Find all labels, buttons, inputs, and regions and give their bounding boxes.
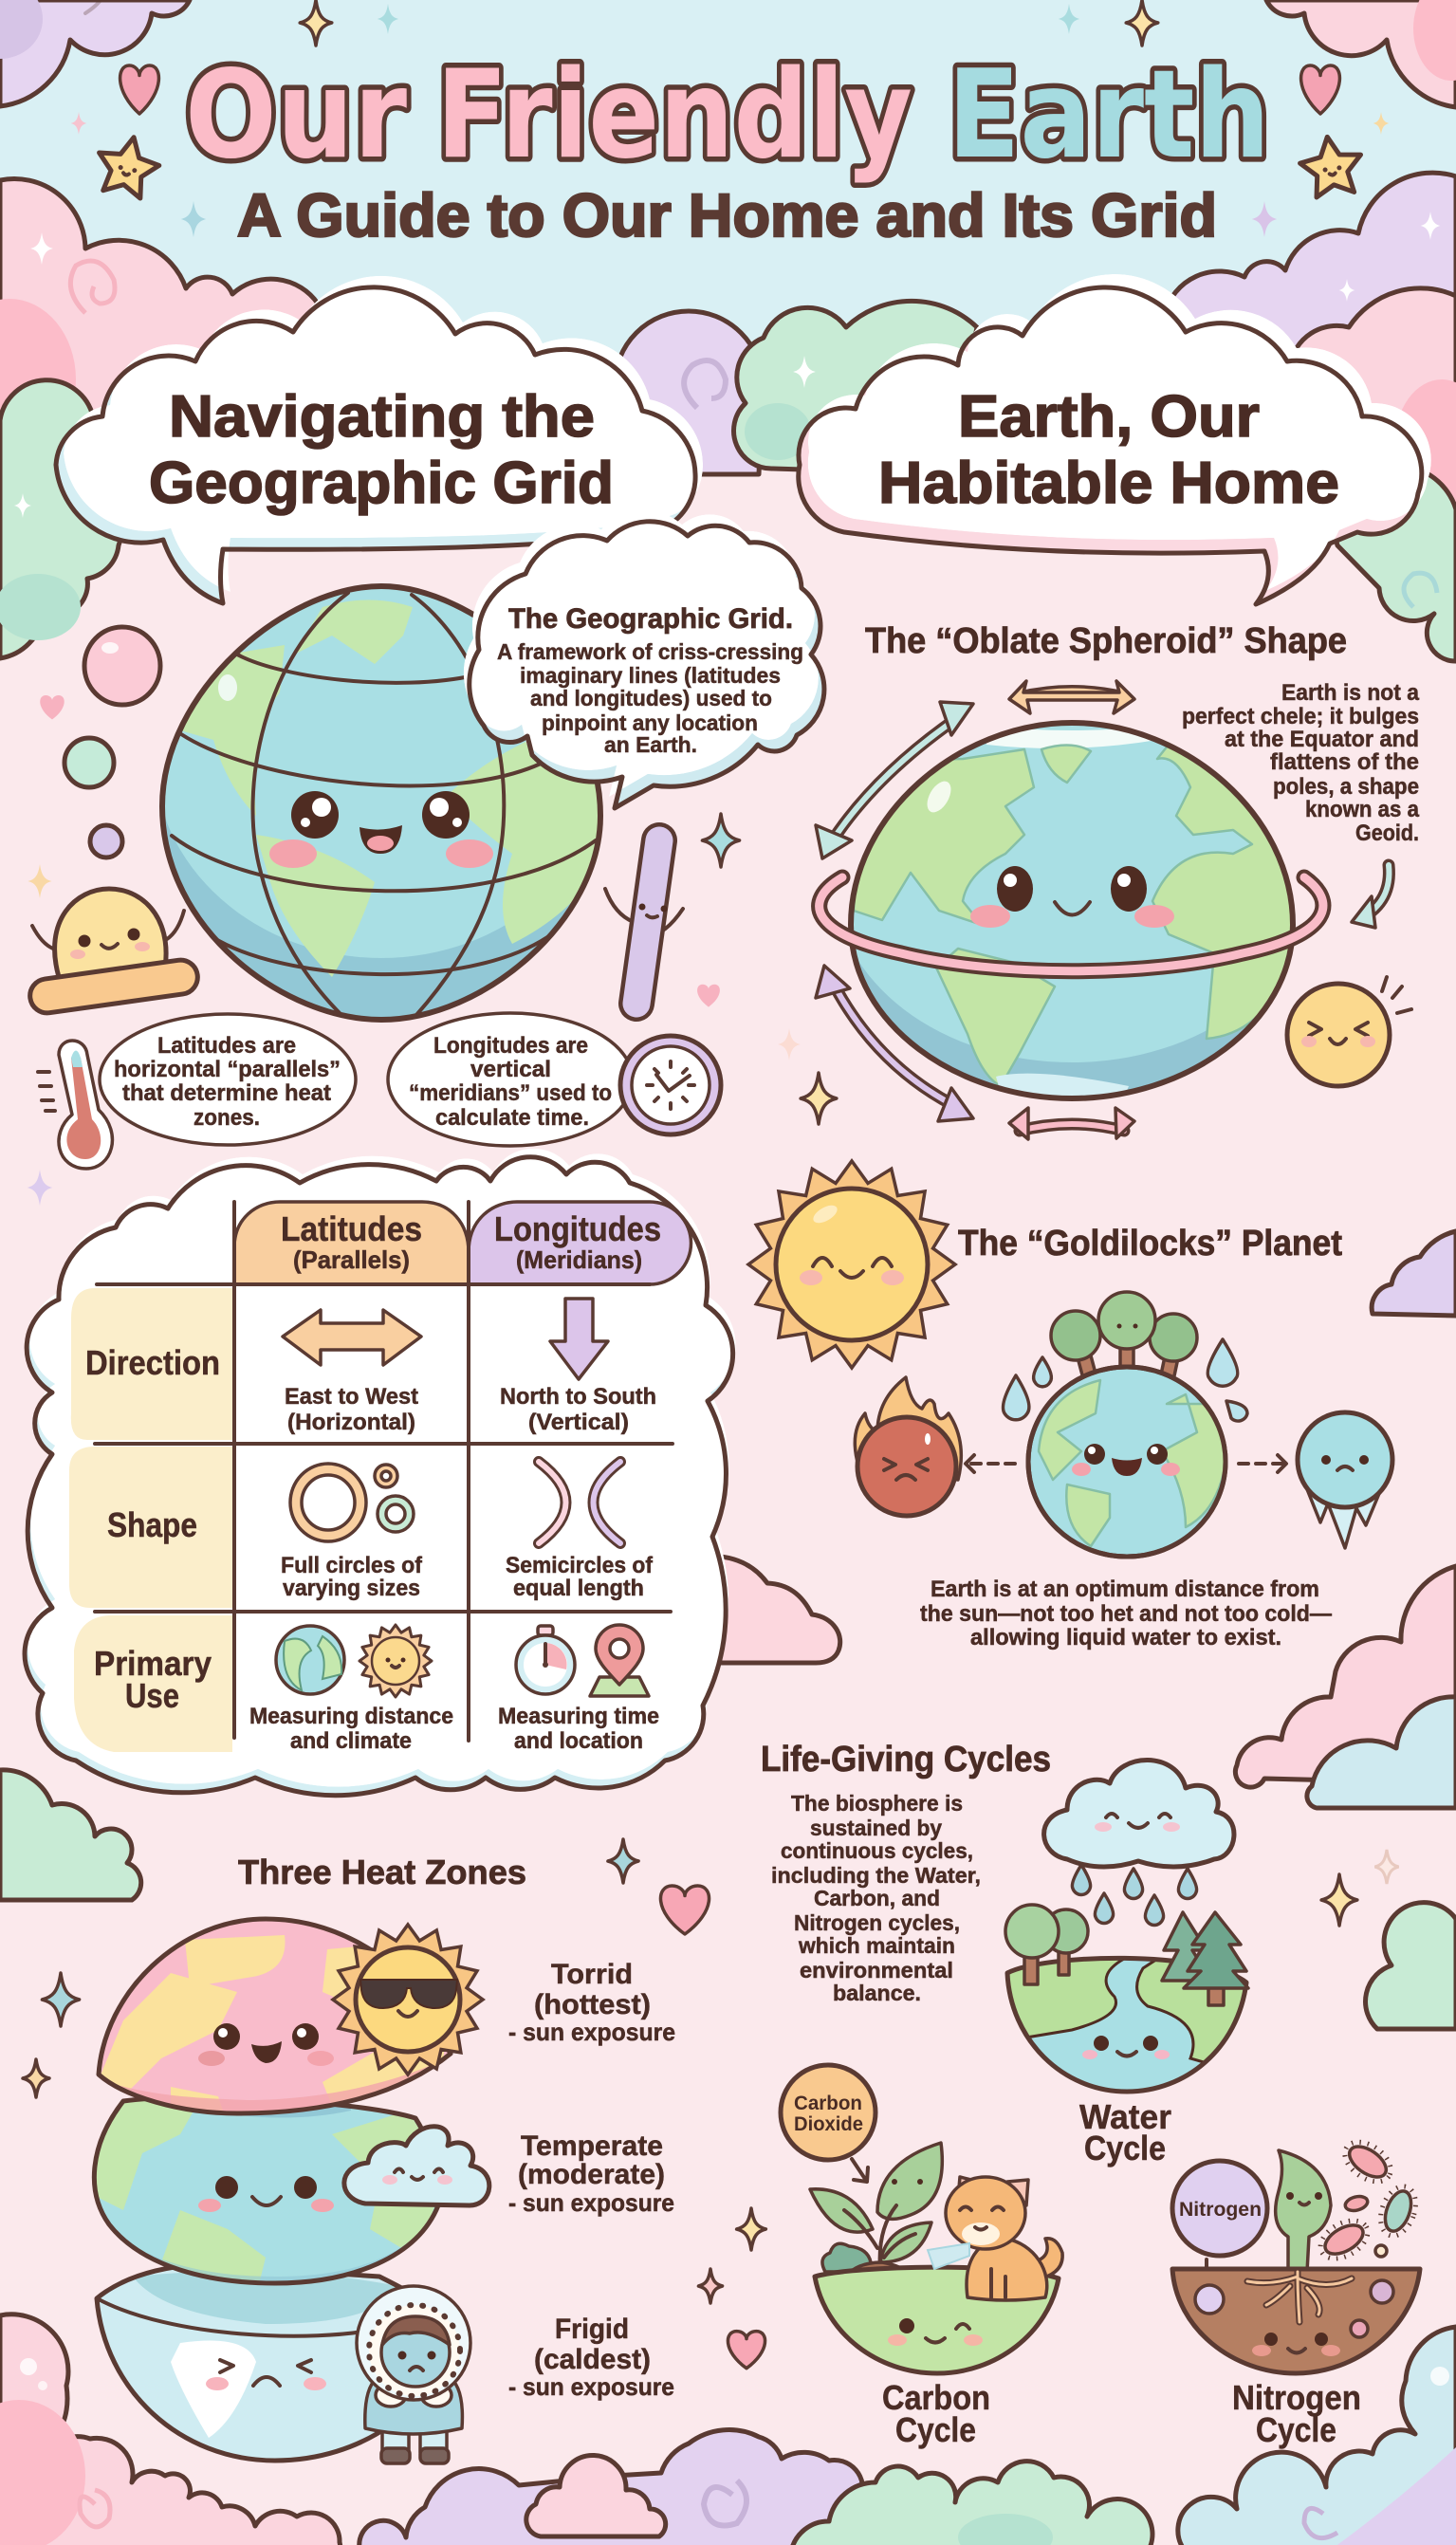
callout body: A framework of criss-cressing [497, 639, 803, 664]
cycles text: including the Water, [771, 1863, 981, 1888]
icon: sun with sunglasses [333, 1925, 483, 2075]
arrows around oblate earth [816, 681, 1389, 1139]
cloud: right green [1335, 466, 1456, 661]
cell text: direction: (Vertical) [528, 1410, 629, 1435]
icon: goldilocks earth [1028, 1292, 1228, 1557]
cell text: direction: North to South [500, 1384, 656, 1410]
zone labels: torrid: Torrid [551, 1959, 633, 1990]
comparison table panel [25, 1149, 736, 1796]
longitude character [605, 840, 683, 1004]
callout body: imaginary lines (latitudes [520, 663, 781, 688]
icon: circles [290, 1464, 414, 1541]
goldilocks text [920, 1577, 1332, 1651]
equator ring [820, 877, 1323, 971]
title: Our [185, 45, 407, 186]
cell text: shape: Full circles of [281, 1553, 423, 1578]
icon: hot planet [855, 1377, 961, 1516]
heading: goldilocks planet: The “Goldilocks” Planet [958, 1224, 1342, 1263]
header: longitudes: Longitudes [494, 1209, 661, 1248]
cloud: left pink [0, 178, 323, 474]
earth face [970, 866, 1174, 928]
nitrogen cycle label [1232, 2378, 1361, 2449]
cycles text: The biosphere is [791, 1791, 963, 1816]
nitrogen cycle label: Nitrogen [1232, 2378, 1361, 2417]
row labels [85, 1343, 220, 1715]
goldilocks text: allowing liquid water to exist. [970, 1625, 1281, 1651]
oval: latitudes text: zones. [194, 1105, 260, 1131]
heading bubble: earth, our habitable home [799, 274, 1431, 604]
oblate text [1182, 680, 1420, 846]
zone labels: frigid: Frigid [555, 2314, 629, 2345]
bottom cloud: purple [359, 2430, 882, 2545]
icon: smiling sun ball [1287, 977, 1411, 1086]
cloud: right teal large [1307, 1697, 1456, 1808]
goldilocks text: Earth is at an optimum distance from [931, 1577, 1319, 1602]
heading bubble: navigating the geographic grid [56, 276, 703, 603]
icon: stopwatch and map pin [516, 1625, 649, 1696]
zone labels: frigid: - sun exposure [508, 2372, 674, 2401]
heading text: Navigating the [169, 384, 595, 450]
trees [1051, 1292, 1197, 1386]
oblate text: flattens of the [1270, 749, 1419, 775]
decorative bubbles [28, 627, 740, 1206]
globe with grid lines [154, 550, 609, 1020]
zone labels: torrid [508, 1959, 675, 2046]
cat [928, 2177, 1062, 2300]
carbon dioxide circle [781, 2065, 875, 2160]
nitrogen cycle label: Cycle [1256, 2410, 1336, 2449]
row labels: Primary [94, 1644, 212, 1683]
icon: semicircles [539, 1462, 620, 1543]
heat zones: temperate layer [91, 2097, 440, 2286]
zone labels: frigid [508, 2314, 674, 2401]
oblate text: Earth is not a [1281, 680, 1420, 706]
cycles text: continuous cycles, [781, 1838, 973, 1863]
rain cloud [1044, 1760, 1234, 1867]
zone labels: torrid: - sun exposure [508, 2018, 675, 2046]
carbon cycle label: Cycle [895, 2410, 976, 2449]
zone labels: temperate: (moderate) [518, 2159, 665, 2190]
callout: the geographic grid [464, 510, 824, 808]
sparkles and hearts around heat zones [23, 1839, 1399, 2369]
carbon dioxide circle: Carbon [794, 2093, 862, 2114]
cell text: shape: varying sizes [283, 1576, 420, 1601]
plant [810, 2143, 942, 2294]
cell text: direction: (Horizontal) [287, 1410, 415, 1435]
sparkles near earth [778, 1028, 837, 1124]
cycles text: sustained by [810, 1816, 942, 1840]
cycles text: which maintain [798, 1933, 955, 1958]
carbon cycle illustration [781, 2065, 1062, 2449]
icon: east-west arrow [283, 1310, 421, 1365]
cell text: direction [285, 1384, 656, 1435]
oval: latitudes text: that determine heat [122, 1080, 331, 1106]
bottom cloud: small pink [526, 2455, 666, 2536]
corner sparkles and hearts [71, 0, 1389, 237]
goldilocks text: the sun—not too het and not too cold— [920, 1601, 1332, 1627]
carbon cycle label [882, 2378, 990, 2449]
callout body [497, 639, 803, 757]
dashed arrow right [1239, 1455, 1286, 1472]
icon: cold planet [1298, 1412, 1392, 1548]
header: longitudes: (Meridians) [516, 1245, 642, 1274]
cell text: primary use [249, 1704, 659, 1754]
thermometer icon [38, 1041, 112, 1169]
cell text: direction: East to West [285, 1384, 418, 1410]
oblate text: Geoid. [1355, 821, 1419, 846]
bottom cloud: left pink [0, 2314, 341, 2545]
icon: mini globe and sun [276, 1625, 432, 1697]
carbon dioxide circle: Dioxide [794, 2113, 863, 2135]
cycles text: environmental [800, 1958, 953, 1983]
heading: oblate spheroid: The “Oblate Spheroid” Shape [865, 621, 1347, 661]
roots [1247, 2272, 1352, 2322]
oval: longitudes text: Longitudes are [433, 1033, 588, 1059]
oblate text: perfect chele; it bulges [1182, 704, 1419, 729]
cell text: primary use: and location [514, 1728, 643, 1754]
cloud: right purple [1165, 173, 1456, 398]
cloud: right pink large [1235, 1566, 1456, 1787]
cloud: middle pink [664, 1556, 840, 1663]
row labels: Use [125, 1676, 179, 1715]
zone labels: torrid: (hottest) [534, 1989, 651, 2020]
title [185, 45, 1270, 186]
callout heading: The Geographic Grid. [508, 603, 793, 635]
sprout [1276, 2150, 1331, 2272]
heading text: Earth, Our [958, 384, 1260, 450]
zone labels: temperate [508, 2130, 674, 2217]
soil details [1195, 2280, 1393, 2356]
cell text: shape: equal length [513, 1576, 644, 1601]
cell text: shape [281, 1553, 654, 1601]
icon: right kawaii star [1297, 133, 1366, 199]
sky band [0, 0, 1456, 469]
icon: smiling sun [748, 1161, 955, 1368]
oval: longitudes text [388, 1013, 633, 1146]
zone labels: temperate: Temperate [521, 2130, 663, 2162]
carbon cycle label: Carbon [882, 2378, 990, 2417]
zone labels: temperate: - sun exposure [508, 2188, 674, 2217]
heading: three heat zones: Three Heat Zones [238, 1853, 526, 1891]
oval: latitudes text: horizontal “parallels” [114, 1057, 341, 1082]
zone labels: frigid: (caldest) [534, 2344, 651, 2375]
water cycle illustration [1005, 1760, 1248, 2167]
cycles text: balance. [833, 1981, 921, 2005]
heading text [878, 384, 1339, 516]
heading text: Habitable Home [878, 451, 1339, 516]
row labels: Shape [107, 1505, 197, 1544]
cell text: primary use: and climate [290, 1728, 412, 1754]
heading text [149, 384, 614, 516]
icon: smiling cloud [344, 2127, 489, 2205]
icon: left kawaii star [92, 131, 164, 201]
title: Earth [948, 45, 1270, 186]
cloud: left green lower [0, 1770, 141, 1900]
water cycle label: Water [1079, 2097, 1171, 2136]
heat zones: torrid layer [95, 1919, 451, 2125]
oval: longitudes text: vertical [470, 1057, 551, 1082]
cloud: centre purple [615, 311, 763, 474]
cloud: right purple small [1372, 1231, 1456, 1316]
header: latitudes: (Parallels) [293, 1245, 410, 1274]
callout body: and longitudes) used to [530, 686, 772, 710]
dashed arrow left [966, 1455, 1015, 1472]
cloud: top-right pink [1266, 0, 1456, 107]
nitrogen circle: Nitrogen [1179, 2199, 1262, 2221]
header: latitudes [234, 1202, 469, 1284]
icon: north-south arrow [550, 1299, 608, 1379]
bottom cloud: green [791, 2462, 1152, 2545]
cell text: primary use: Measuring time [498, 1704, 659, 1729]
icon: child in parka [357, 2286, 470, 2463]
bacteria [1314, 2134, 1422, 2266]
clock icon [620, 1036, 721, 1134]
nitrogen cycle illustration [1172, 2134, 1422, 2449]
callout body: pinpoint any location [542, 710, 758, 735]
oval: longitudes text: “meridians” used to [409, 1080, 612, 1106]
oval: latitudes text [100, 1014, 356, 1145]
cloud: centre green [734, 301, 977, 474]
header: longitudes [469, 1202, 691, 1284]
oblate text: at the Equator and [1225, 727, 1419, 752]
callout body: an Earth. [604, 732, 697, 757]
cell text: primary use: Measuring distance [249, 1704, 453, 1729]
water cycle label [1079, 2097, 1171, 2167]
title: Friendly [436, 45, 912, 186]
oblate earth globe [820, 702, 1323, 1110]
trees [1005, 1905, 1248, 2005]
cloud: left green [0, 380, 142, 658]
water drops [1004, 1339, 1247, 1421]
heading: life-giving cycles: Life-Giving Cycles [761, 1740, 1051, 1780]
bottom cloud: right blue [1178, 2327, 1456, 2545]
row label backgrounds [69, 1288, 232, 1752]
cycles text: Carbon, and [814, 1886, 940, 1910]
rain drops [1072, 1865, 1197, 1925]
cloud: top-left purple [0, 0, 190, 106]
heading text: Geographic Grid [149, 451, 614, 516]
water cycle label: Cycle [1084, 2129, 1166, 2167]
cycles text: Nitrogen cycles, [794, 1910, 960, 1935]
globe face [269, 791, 493, 868]
cell text: shape: Semicircles of [506, 1553, 654, 1578]
latitude character [28, 889, 200, 1015]
header: latitudes: Latitudes [281, 1209, 422, 1248]
nitrogen circle [1172, 2161, 1267, 2286]
cloud: right green lower [1366, 1903, 1456, 2029]
cycles text [771, 1791, 981, 2005]
row labels: Direction [85, 1343, 220, 1382]
oval: longitudes text: calculate time. [435, 1105, 589, 1131]
cloud: right pink [1290, 288, 1456, 517]
oblate text: poles, a shape [1273, 774, 1419, 800]
oval: latitudes text: Latitudes are [157, 1033, 296, 1059]
heat zones: frigid layer [95, 2267, 402, 2462]
subtitle: A Guide to Our Home and Its Grid [237, 181, 1217, 249]
oblate text: known as a [1305, 797, 1420, 822]
